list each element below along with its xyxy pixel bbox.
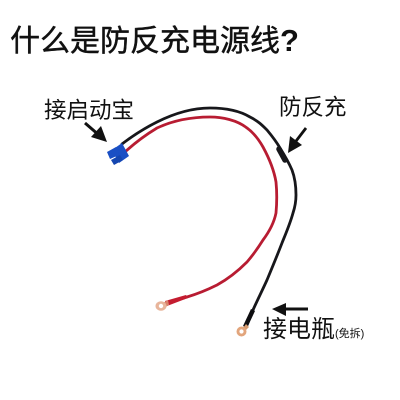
arrow: to module xyxy=(288,128,306,153)
title: 什么是防反充电源线? xyxy=(10,23,299,58)
blue connector xyxy=(107,143,129,165)
black wire xyxy=(122,108,296,328)
label: connector: 接启动宝 xyxy=(44,98,134,123)
red wire xyxy=(126,117,277,306)
arrow: to connector xyxy=(85,123,107,142)
label: battery connection: 接电瓶(免拆) xyxy=(263,316,364,343)
inline module on black wire xyxy=(279,149,285,160)
arrow: to battery xyxy=(272,303,308,316)
label: anti-backcharge module: 防反充 xyxy=(279,95,347,120)
ring terminal: red wire xyxy=(156,300,169,311)
ring terminal: black wire xyxy=(236,324,249,336)
